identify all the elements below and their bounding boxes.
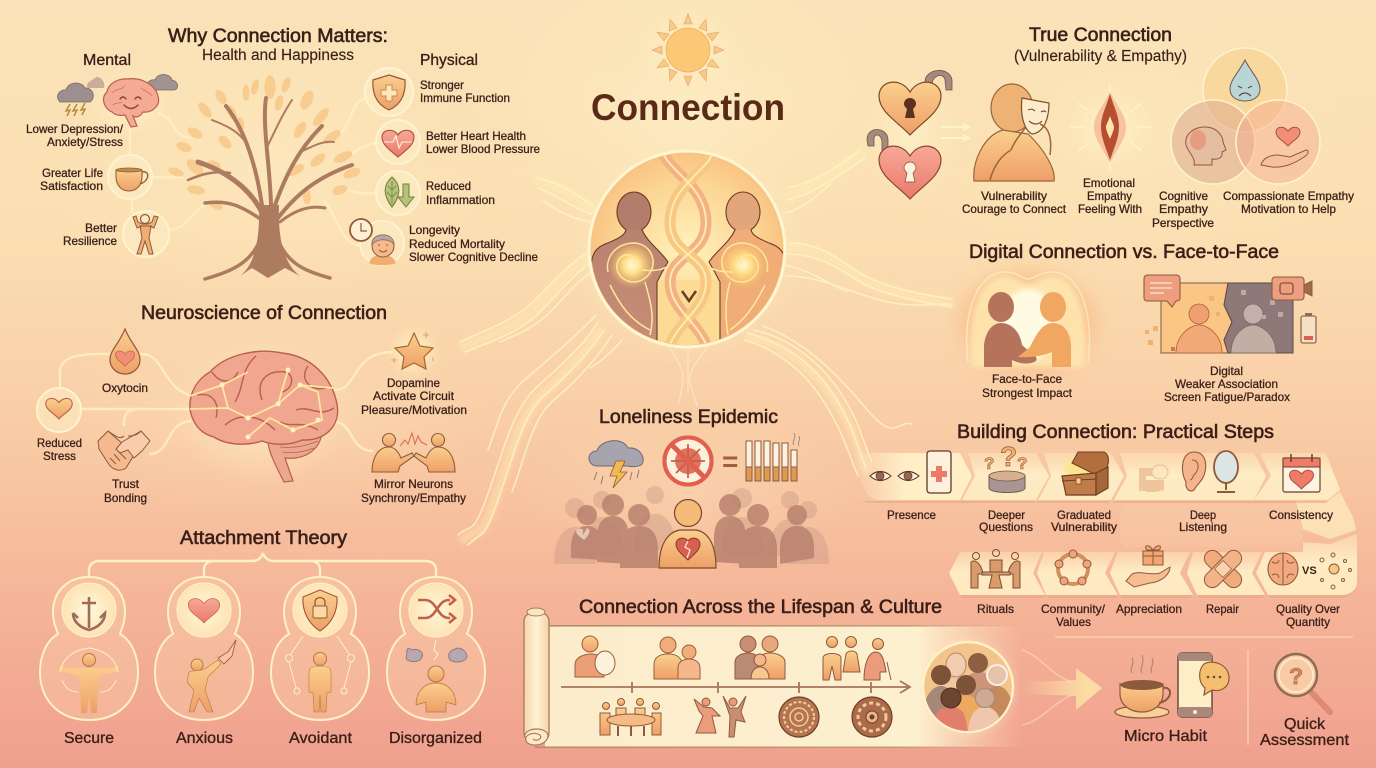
icon: treasure chest <box>1062 452 1108 495</box>
label: digital: Digital <box>1210 364 1243 378</box>
icon: resilient figure <box>123 211 169 257</box>
icon: sun <box>633 2 743 98</box>
icon: open-armed figure <box>60 648 118 713</box>
icon: hand with heart <box>1261 127 1308 167</box>
label: compassionate empathy: Compassionate Empathy <box>1223 189 1354 203</box>
flowing energy rays from central circle <box>458 150 952 545</box>
label: quick assessment: Assessment <box>1260 732 1350 749</box>
label: community values: Community/ <box>1041 602 1106 616</box>
timeline arrow <box>561 681 910 693</box>
label: quick assessment <box>1260 716 1350 749</box>
label: digital: Screen Fatigue/Paradox <box>1164 390 1290 404</box>
arrow to micro habit <box>1022 650 1102 725</box>
right figure <box>709 192 786 345</box>
label: longevity: Slower Cognitive Decline <box>409 250 538 264</box>
label: deep listening <box>1179 508 1227 534</box>
label: longevity: Reduced Mortality <box>409 237 505 251</box>
icon: person removing mask <box>974 84 1054 181</box>
attachment tree bracket <box>89 553 436 576</box>
label: compassionate empathy: Motivation to Help <box>1241 202 1336 216</box>
label: longevity <box>409 223 538 264</box>
icon: locked and open hearts <box>858 65 962 205</box>
icon: phone with chat bubble <box>1178 653 1229 717</box>
panel: secure <box>40 577 138 720</box>
label: disorganized: Disorganized <box>389 730 482 747</box>
icon: tree <box>167 75 362 279</box>
label: graduated vulnerability: Vulnerability <box>1051 520 1117 534</box>
label: secure: Secure <box>64 730 114 747</box>
heading: true connection <box>1014 24 1187 65</box>
label: deeper questions <box>979 508 1033 534</box>
label: better resilience <box>63 221 117 248</box>
label: emotional empathy: Emotional <box>1083 176 1135 190</box>
left figure <box>591 192 668 345</box>
subheading: physical: Physical <box>420 52 478 69</box>
heading: digital vs face-to-face: Digital Connection vs. Face-to-Face <box>969 241 1279 263</box>
label: longevity: Longevity <box>409 223 460 237</box>
icon: handshake <box>98 431 150 470</box>
icon: chat bubble <box>1144 275 1180 307</box>
connector lines around tree <box>130 97 377 245</box>
steps flow: bottom row <box>949 534 1357 598</box>
icon: magnifier with question mark: ? <box>1289 663 1303 689</box>
heading: lifespan and culture: Connection Across the Lifespan & Culture <box>579 596 942 618</box>
label: community values <box>1041 602 1106 629</box>
label: repair: Repair <box>1206 602 1239 616</box>
label: cognitive empathy <box>1152 189 1214 230</box>
icon: coffee cup on saucer <box>1115 655 1170 718</box>
label: avoidant: Avoidant <box>289 730 353 747</box>
icon: crossed arrows <box>418 595 455 623</box>
label: immune function: Immune Function <box>420 91 510 105</box>
label: reduced stress: Stress <box>43 449 76 463</box>
label: quality over quantity: Quantity <box>1286 615 1330 629</box>
icon: head profile <box>1186 127 1226 165</box>
icon: older couple <box>823 636 891 680</box>
icon: reduced stress heart <box>37 388 81 432</box>
label: lower depression: Lower Depression/ <box>26 122 124 136</box>
icon: shield <box>365 68 413 116</box>
icon: dancers <box>694 696 746 737</box>
icon: dopamine star <box>386 324 442 380</box>
icon: question ring: ? <box>1017 454 1027 473</box>
divider line <box>1055 636 1353 638</box>
icon: round table gathering <box>600 698 661 736</box>
icon: friends <box>654 637 700 679</box>
label: dopamine: Activate Circuit <box>373 389 455 403</box>
panel: anxious <box>155 577 253 720</box>
label: immune function <box>420 78 510 105</box>
icon: faint hands <box>1139 465 1168 492</box>
icon: anchor <box>73 597 105 630</box>
icon: overwhelmed figure <box>406 640 467 712</box>
label: greater life satisfaction: Satisfaction <box>40 179 103 193</box>
icon: digital screen split <box>1145 283 1293 353</box>
label: trust bonding: Bonding <box>104 491 147 505</box>
label: deep listening: Deep <box>1190 508 1216 522</box>
heading: true connection: (Vulnerability & Empathy) <box>1014 48 1187 65</box>
icon: emotional empathy glow <box>1068 84 1152 170</box>
icon: gift on hand <box>1126 546 1170 587</box>
icon: cigarettes <box>746 433 800 481</box>
label: quality over quantity: Quality Over <box>1276 602 1340 616</box>
label: dopamine <box>361 376 467 417</box>
label: vulnerability: Courage to Connect <box>962 202 1067 216</box>
icon: lock shield <box>303 590 337 631</box>
icon: eyes and phone <box>870 451 951 493</box>
label: better resilience: Better <box>85 221 117 235</box>
connector band between step rows <box>1120 492 1356 547</box>
icon: parent and baby <box>575 636 615 677</box>
label: dopamine: Dopamine <box>387 376 440 390</box>
label: cognitive empathy: Empathy <box>1159 202 1208 216</box>
label: face-to-face <box>982 372 1073 400</box>
label: graduated vulnerability: Graduated <box>1057 508 1111 522</box>
icon: question ring: ? <box>984 454 994 473</box>
label: reduced inflammation <box>426 179 495 207</box>
icon: video camera <box>1272 277 1312 300</box>
label: mirror neurons <box>361 477 466 505</box>
icon: pulsing heart <box>188 599 220 623</box>
icon: ritual table <box>971 550 1020 588</box>
label: lower depression: Anxiety/Stress <box>47 135 123 149</box>
label: mirror neurons: Synchrony/Empathy <box>361 491 466 505</box>
vertical divider <box>1247 650 1249 745</box>
label: rituals: Rituals <box>977 602 1014 616</box>
title: Connection <box>591 87 785 128</box>
label: reduced stress: Reduced <box>37 436 82 450</box>
label: anxious: Anxious <box>176 730 233 747</box>
label: greater life satisfaction: Greater Life <box>42 166 103 180</box>
panel: avoidant <box>271 577 369 720</box>
arrows <box>941 124 969 141</box>
label: dopamine: Pleasure/Motivation <box>361 403 467 417</box>
connector lines around brain <box>60 352 392 454</box>
icon: family <box>735 636 785 679</box>
icon: ear and mirror <box>1182 451 1238 492</box>
subheading: mental: Mental <box>83 52 131 69</box>
icon: cultural disc 1 <box>779 697 819 737</box>
heading: true connection: True Connection <box>1029 24 1172 46</box>
label: vulnerability <box>962 189 1067 216</box>
label: appreciation: Appreciation <box>1116 602 1182 616</box>
label: greater life satisfaction <box>40 166 103 193</box>
label: reduced inflammation: Inflammation <box>426 193 495 207</box>
label: equals: = <box>722 446 738 477</box>
label: deeper questions: Questions <box>979 520 1033 534</box>
icon: clouds and happy brain <box>58 68 178 136</box>
icon: reaching figure <box>187 640 236 712</box>
icon: question ring <box>984 441 1027 492</box>
icon: calendar heart <box>1283 454 1320 492</box>
label: heart health <box>426 129 540 156</box>
label: trust bonding: Trust <box>112 477 140 491</box>
icon: coffee cup <box>108 155 152 199</box>
icon: human brain <box>171 335 355 485</box>
icon: face-to-face handshake <box>962 272 1094 372</box>
label: reduced inflammation: Reduced <box>426 179 471 193</box>
label: deep listening: Listening <box>1179 520 1227 534</box>
icon: brain vs dots <box>1268 553 1352 589</box>
label: digital: Weaker Association <box>1175 377 1278 391</box>
icon: low battery <box>1301 313 1316 343</box>
icon: storm cloud <box>589 441 643 488</box>
label: community values: Values <box>1056 615 1091 629</box>
illustration: diverse group circle <box>924 640 1015 734</box>
label: emotional empathy <box>1078 176 1142 216</box>
label: quality over quantity <box>1276 602 1340 629</box>
icon: clock and elder <box>350 219 404 265</box>
heading: why connection matters: Why Connection Matters: <box>168 25 388 47</box>
label: heart health: Better Heart Health <box>426 129 526 143</box>
icon: community ring <box>1055 550 1091 585</box>
label: cognitive empathy: Perspective <box>1152 216 1214 230</box>
icon: mirror neurons <box>372 433 455 472</box>
label: cognitive empathy: Cognitive <box>1159 189 1208 203</box>
label: digital <box>1164 364 1290 404</box>
label: compassionate empathy <box>1223 189 1354 216</box>
icon: isolated figure <box>286 636 354 712</box>
label: better resilience: Resilience <box>63 234 117 248</box>
label: graduated vulnerability <box>1051 508 1117 534</box>
icon: sad water drop <box>1230 60 1260 101</box>
icon: question ring: ? <box>1000 441 1017 472</box>
icon: cultural disc 2 <box>852 697 892 737</box>
heading: neuroscience: Neuroscience of Connection <box>141 302 387 324</box>
icon: oxytocin drop <box>110 329 140 374</box>
label: lower depression <box>26 122 124 149</box>
label: emotional empathy: Empathy <box>1087 189 1132 203</box>
label: mirror neurons: Mirror Neurons <box>374 477 453 491</box>
heading: loneliness epidemic: Loneliness Epidemic <box>599 406 778 428</box>
panel: disorganized <box>387 577 485 720</box>
icon: leaf and down arrow <box>376 171 420 215</box>
label: oxytocin: Oxytocin <box>102 381 148 395</box>
label: reduced stress <box>37 436 82 463</box>
heading: why connection matters: Health and Happiness <box>202 47 354 64</box>
icon: virus crossed out <box>663 436 713 486</box>
label: emotional empathy: Feeling With <box>1078 202 1142 216</box>
heading: building connection: Building Connection: Practical Steps <box>957 421 1274 443</box>
label: consistency: Consistency <box>1269 508 1333 522</box>
label: vulnerability: Vulnerability <box>981 189 1047 203</box>
illustration: lonely crowd <box>554 486 829 568</box>
label: micro habit: Micro Habit <box>1124 728 1208 745</box>
panel: scroll timeline <box>524 608 1022 748</box>
label: presence: Presence <box>887 508 936 522</box>
label: heart health: Lower Blood Pressure <box>426 142 540 156</box>
label: face-to-face: Strongest Impact <box>982 386 1073 400</box>
icon: bandage <box>1201 547 1245 591</box>
heading: why connection matters <box>168 25 388 64</box>
scroll roll <box>524 608 549 745</box>
icon: heart with pulse <box>376 120 420 164</box>
label: immune function: Stronger <box>420 78 464 92</box>
venn diagram: three empathies <box>1171 48 1320 184</box>
label: face-to-face: Face-to-Face <box>992 372 1062 386</box>
heading: attachment theory: Attachment Theory <box>180 527 347 549</box>
central circle: two figures entwined <box>588 150 786 348</box>
steps flow: top row <box>852 453 1340 503</box>
icon: magnifier with question mark <box>1275 654 1330 712</box>
label: quick assessment: Quick <box>1284 716 1326 733</box>
label: trust bonding <box>104 477 147 505</box>
label: deeper questions: Deeper <box>988 508 1025 522</box>
icon: brain vs dots: VS <box>1302 565 1317 577</box>
